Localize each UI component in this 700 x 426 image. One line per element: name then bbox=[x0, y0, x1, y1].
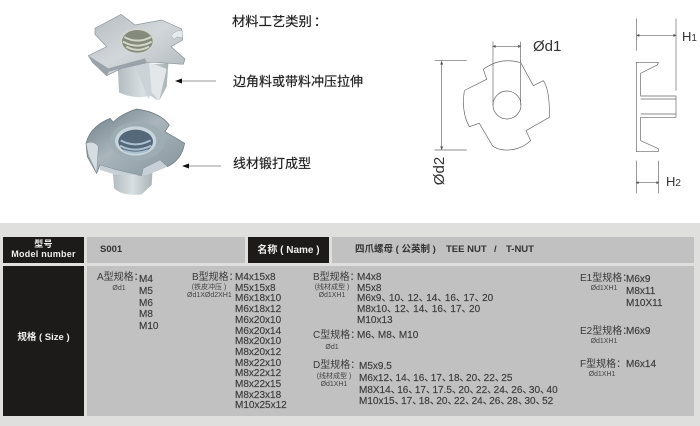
E1 type: Ød1XH1 bbox=[591, 285, 617, 292]
label: H2: H2 bbox=[666, 174, 681, 189]
C type: C型规格： bbox=[313, 330, 360, 341]
B type stamped: M8x22x12 bbox=[235, 368, 281, 379]
B type wire: M10x13 bbox=[357, 315, 393, 326]
B type stamped: M5x15x8 bbox=[235, 283, 276, 294]
F type: Ød1XH1 bbox=[589, 371, 615, 378]
B type stamped: M8x20x10 bbox=[235, 336, 281, 347]
E1 type: E1型规格： bbox=[580, 273, 632, 284]
D type: M6x12、14、16、17、18、20、22、25 bbox=[359, 373, 512, 384]
value: name: 四爪螺母 ( 公英制 ) bbox=[355, 244, 436, 255]
drawing: top view with d1 and d2 dimensions bbox=[434, 42, 550, 150]
D type: Ød1XH1 bbox=[321, 380, 347, 388]
D type: (线材成型 ) bbox=[317, 373, 351, 380]
C type bbox=[313, 329, 418, 351]
heading: material process: 材料工艺类别： bbox=[232, 14, 327, 29]
B type stamped: M6x18x12 bbox=[235, 304, 281, 315]
panel: specification table bbox=[0, 223, 700, 426]
value: name: TEE NUT bbox=[446, 244, 487, 255]
panel: size values bbox=[87, 266, 694, 416]
A type: M4 bbox=[139, 274, 153, 285]
label: stamped process: 边角料或带料冲压拉伸 bbox=[233, 74, 363, 89]
header: name: 名称 ( Name ) bbox=[257, 245, 320, 256]
E1 type: M6x9 bbox=[626, 274, 650, 285]
B type stamped: M4x15x8 bbox=[235, 272, 276, 283]
B type wire: M6x9、10、12、14、16、17、20 bbox=[357, 293, 493, 304]
header: size: 规格 ( Size ) bbox=[17, 332, 70, 343]
value: name: T-NUT bbox=[506, 244, 534, 255]
F type bbox=[580, 358, 656, 378]
label: H1: H1 bbox=[682, 29, 697, 44]
F type: M6x14 bbox=[626, 359, 656, 370]
E1 type bbox=[580, 272, 663, 309]
B type wire: M5x8 bbox=[357, 283, 381, 294]
A type: M5 bbox=[139, 286, 153, 297]
B type stamped: Ød1XØd2XH1 bbox=[187, 292, 232, 298]
B type stamped: M8x20x12 bbox=[235, 347, 281, 358]
header: model number: 型号 bbox=[34, 239, 53, 249]
label: forged process: 线材锻打成型 bbox=[233, 156, 311, 171]
E2 type: M6x9 bbox=[626, 326, 650, 337]
B type stamped: M6x20x14 bbox=[235, 326, 281, 337]
D type: D型规格： bbox=[313, 360, 360, 371]
B type stamped: M8x23x18 bbox=[235, 390, 281, 401]
E1 type: M10X11 bbox=[626, 298, 663, 309]
arrow: stamped process bbox=[175, 78, 216, 84]
F type: F型规格： bbox=[580, 359, 626, 370]
C type: M6、M8、M10 bbox=[357, 330, 418, 341]
B type stamped: M8x22x10 bbox=[235, 358, 281, 369]
B type wire: M8x10、12、14、16、17、20 bbox=[357, 304, 480, 315]
header: size bbox=[3, 266, 84, 416]
value: model bbox=[87, 237, 245, 263]
header: model number: Model number bbox=[11, 248, 76, 258]
B type stamped: M10x25x12 bbox=[235, 400, 287, 411]
A type bbox=[97, 271, 158, 332]
header: name bbox=[248, 237, 329, 263]
photo: forged tee nut bbox=[86, 108, 185, 195]
header: model number bbox=[3, 237, 84, 263]
A type: A型规格： bbox=[97, 272, 144, 283]
value: model: S001 bbox=[100, 244, 122, 255]
D type bbox=[313, 359, 558, 407]
B type stamped bbox=[187, 271, 287, 411]
E2 type: E2型规格： bbox=[580, 326, 632, 337]
B type stamped: (铁皮冲压 ) bbox=[192, 284, 226, 291]
label: d2: Ød2 bbox=[431, 157, 448, 185]
photo: stamped tee nut bbox=[88, 14, 186, 100]
B type stamped: B型规格： bbox=[192, 272, 239, 283]
value: name: / bbox=[494, 244, 497, 255]
label: d1: Ød1 bbox=[533, 38, 561, 55]
E2 type: Ød1XH1 bbox=[591, 338, 617, 345]
arrow: forged process bbox=[182, 164, 221, 168]
C type: Ød1 bbox=[325, 344, 339, 351]
A type: M6 bbox=[139, 298, 153, 309]
D type: M8X14、16、17、17.5、20、22、24、26、30、40 bbox=[359, 385, 558, 396]
value: name bbox=[332, 237, 694, 263]
E2 type bbox=[580, 325, 650, 345]
drawing: side view with H1 and H2 dimensions bbox=[636, 18, 677, 194]
B type stamped: M6x20x10 bbox=[235, 315, 281, 326]
B type wire: B型规格： bbox=[313, 272, 360, 283]
D type: M10x15、17、18、20、22、24、26、28、30、52 bbox=[359, 396, 553, 407]
B type wire: Ød1XH1 bbox=[319, 292, 345, 298]
A type: M8 bbox=[139, 309, 153, 320]
B type wire: (线材成型 ) bbox=[315, 284, 349, 291]
A type: Ød1 bbox=[112, 285, 126, 292]
A type: M10 bbox=[139, 321, 158, 332]
D type: M5x9.5 bbox=[359, 361, 392, 372]
B type stamped: M6x18x10 bbox=[235, 293, 281, 304]
E1 type: M8x11 bbox=[626, 286, 655, 297]
B type stamped: M8x22x15 bbox=[235, 379, 281, 390]
B type wire bbox=[313, 271, 493, 326]
B type wire: M4x8 bbox=[357, 272, 381, 283]
